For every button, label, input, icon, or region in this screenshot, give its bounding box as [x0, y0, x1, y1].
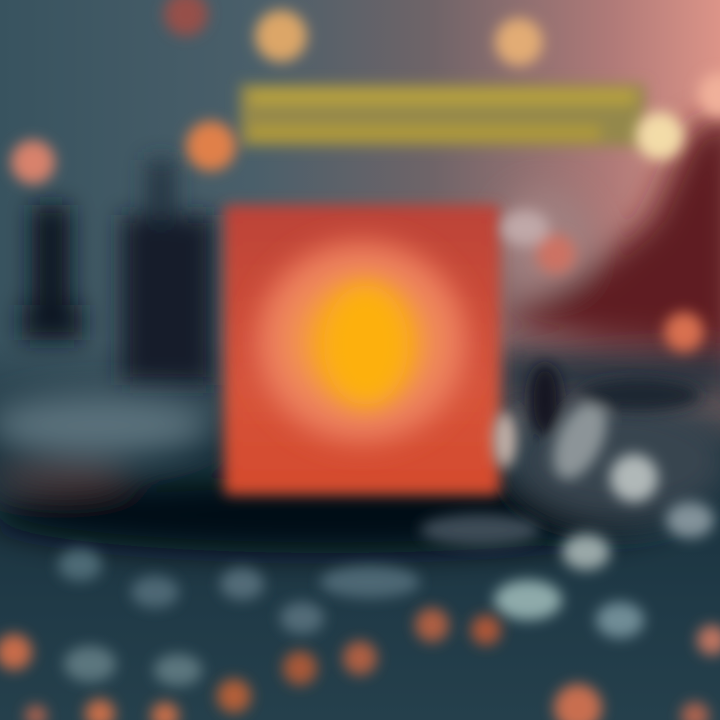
central orange panel — [224, 205, 500, 495]
glowing lights — [11, 0, 720, 352]
scattered pieces on the right — [320, 364, 714, 638]
blurred title band — [240, 84, 645, 146]
coin symbol — [324, 285, 408, 405]
dark red foliage on the right — [500, 110, 720, 400]
dark ground shadow — [0, 395, 720, 553]
orange lights along the bottom — [0, 608, 720, 720]
glowing circle — [244, 230, 480, 454]
dark towers on the left — [22, 160, 214, 385]
scattered pieces on the bottom left — [58, 549, 324, 686]
